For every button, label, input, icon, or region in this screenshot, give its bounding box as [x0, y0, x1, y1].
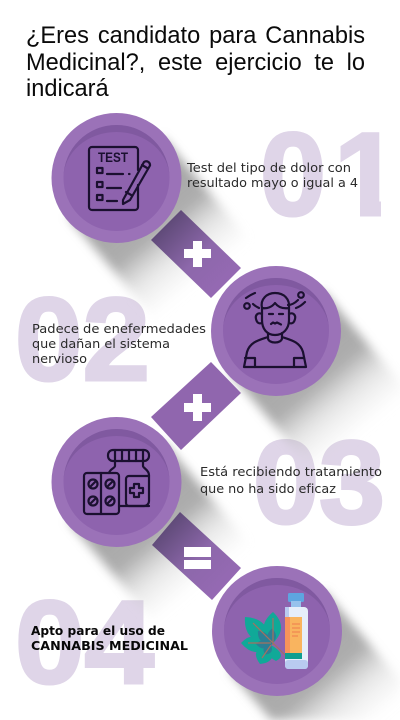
text block 3: que no ha sido eficaz: [200, 482, 336, 496]
connector: plus 2: [151, 362, 241, 450]
icon: leaf: [241, 612, 286, 664]
shadow: circle 4: [230, 591, 400, 720]
number 01: 1: [334, 109, 400, 241]
shadow: circle 3: [69, 442, 251, 625]
number 01: 0: [260, 109, 326, 241]
connector: equals: [152, 512, 241, 600]
shadow: circle 1: [69, 138, 251, 321]
text block 2: nervioso: [32, 352, 87, 366]
title: [26, 23, 365, 102]
circle 4: cannabis and vial icon: [212, 566, 342, 696]
icon: person: [244, 292, 306, 367]
title: ¿Eres candidato para Cannabis: [26, 23, 365, 49]
circle 3: medicine icon: [52, 417, 182, 547]
text block 4: Apto para el uso de: [31, 623, 165, 638]
number 02: 02: [15, 274, 150, 406]
number 04: 04: [15, 577, 154, 709]
connector: plus 1: [151, 210, 241, 298]
icon: vial: [285, 593, 308, 669]
text block 3: Está recibiendo tratamiento: [200, 465, 382, 479]
text block 2: [32, 322, 206, 366]
text block 1: Test del tipo de dolor con: [186, 161, 351, 175]
circle 1: test icon: [52, 113, 182, 243]
circle 2: dizzy person icon: [211, 266, 341, 396]
icon: pills and bottle: [84, 450, 149, 514]
shadow: circle 2: [229, 291, 400, 474]
text block 2: Padece de enefermedades: [32, 322, 206, 336]
number 01: [263, 131, 381, 218]
title: Medicinal?, este ejercicio te lo: [26, 50, 365, 76]
text block 4: CANNABIS MEDICINAL: [31, 638, 188, 653]
text block 1: resultado mayo o igual a 4: [187, 176, 358, 190]
number 03: 03: [253, 417, 385, 549]
icon: test sheet: TEST: [98, 150, 129, 165]
text block 3: [200, 465, 382, 496]
text block 4: [31, 623, 188, 653]
title: indicará: [26, 76, 109, 102]
text block 2: que dañan el sistema: [32, 337, 170, 351]
text block 1: [186, 161, 358, 190]
